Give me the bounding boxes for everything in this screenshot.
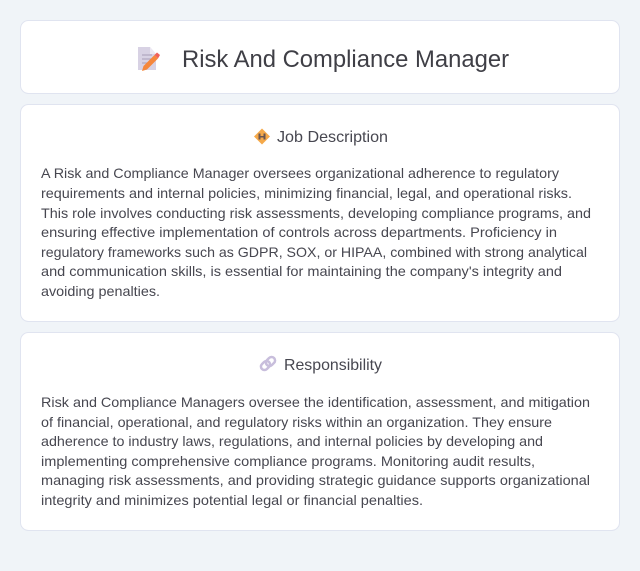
text block: responsibility: adherence to industry laws, regulations, and internal policies by developing and bbox=[41, 433, 543, 449]
heading: job description: Job Description bbox=[277, 129, 388, 146]
text block: responsibility: Risk and Compliance Managers oversee the identification, assessment, and mitigation bbox=[41, 394, 590, 410]
title: Risk And Compliance Manager bbox=[182, 46, 509, 73]
icon: document with pencil bbox=[138, 47, 160, 71]
panel: title card bbox=[20, 20, 620, 94]
panel: job description bbox=[20, 104, 620, 322]
text block: job description: avoiding penalties. bbox=[41, 283, 160, 299]
text block: job description: A Risk and Compliance Manager oversees organizational adherence to regulatory bbox=[41, 165, 559, 181]
text block: job description: ensuring effective implementation of controls across departments. Proficiency in bbox=[41, 224, 557, 240]
icon: diamond road sign bbox=[254, 128, 270, 144]
text block: responsibility: integrity and minimizes potential legal or financial penalties. bbox=[41, 492, 423, 508]
panel: responsibility bbox=[20, 332, 620, 530]
icon: chain link bbox=[259, 355, 277, 372]
text block: job description: requirements and internal policies, minimizing financial, legal, and operational risks. bbox=[41, 185, 572, 201]
heading: responsibility: Responsibility bbox=[284, 357, 382, 374]
text block: job description: and communication skills, is essential for maintaining the company's integrity and bbox=[41, 263, 562, 279]
text block: job description bbox=[41, 165, 591, 299]
text block: job description: This role involves conducting risk assessments, developing compliance programs, and bbox=[41, 205, 591, 221]
text block: responsibility: of financial, operational, and regulatory risks within an organization. They ensure bbox=[41, 414, 552, 430]
text block: job description: regulatory frameworks such as GDPR, SOX, or HIPAA, combined with strong analytical bbox=[41, 244, 587, 260]
text block: responsibility: implementing comprehensive compliance programs. Monitoring audit results, bbox=[41, 453, 535, 469]
text block: responsibility: managing risk assessments, and providing strategic guidance supports organizational bbox=[41, 472, 590, 488]
text block: responsibility bbox=[41, 394, 590, 508]
